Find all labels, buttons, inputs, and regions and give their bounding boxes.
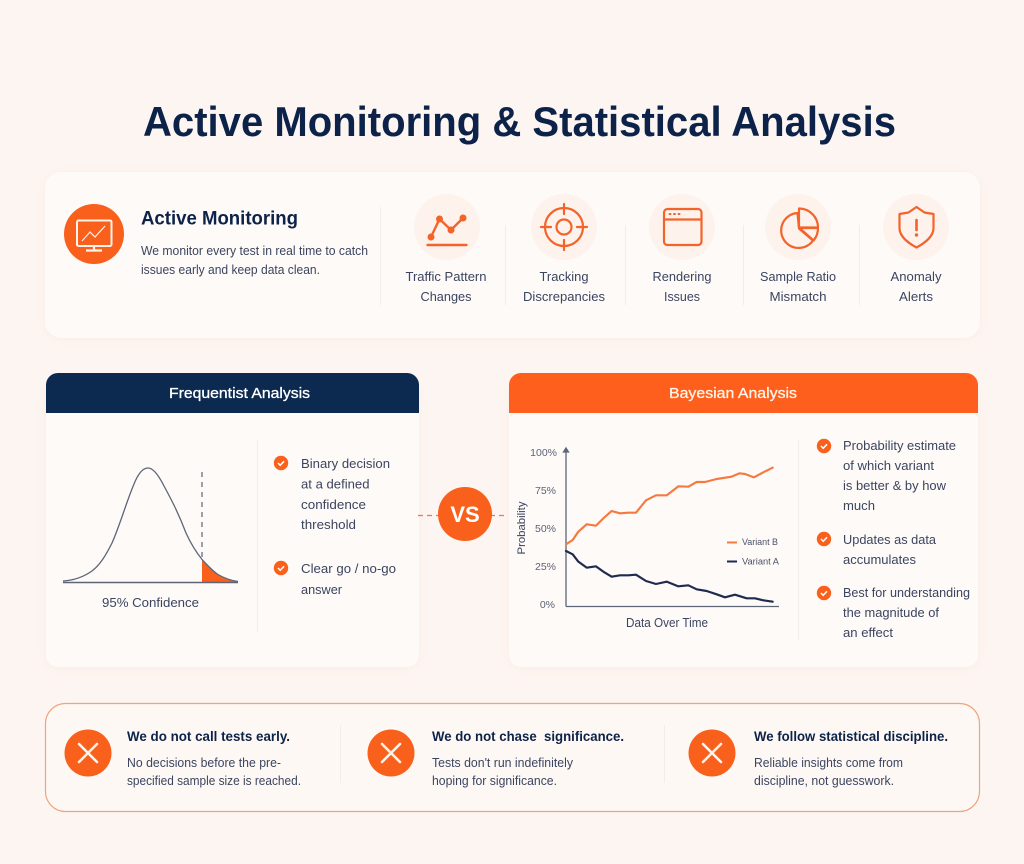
header: bayesian analysis bbox=[509, 373, 978, 413]
bullet: binary decision: threshold bbox=[301, 518, 356, 532]
chart: probability over time: Variant B bbox=[742, 537, 778, 547]
bullet: binary decision: Binary decision bbox=[301, 457, 390, 471]
chart: probability over time: 100% bbox=[530, 447, 557, 459]
icon: monitor bbox=[64, 204, 124, 264]
bullet: clear go / no-go bbox=[274, 561, 396, 597]
item: do not call tests early: We do not call tests early. bbox=[127, 729, 290, 744]
chart: probability over time: Data Over Time bbox=[626, 616, 708, 630]
item: traffic pattern changes: Traffic Pattern bbox=[406, 270, 487, 284]
bullet: probability estimate bbox=[817, 439, 956, 513]
chart: probability over time: 0% bbox=[540, 599, 555, 611]
item: tracking discrepancies: Tracking bbox=[540, 270, 589, 284]
panel: statistical discipline bbox=[46, 704, 980, 812]
vs badge: VS bbox=[450, 502, 480, 527]
bullet: clear go / no-go: answer bbox=[301, 583, 342, 597]
header: frequentist analysis bbox=[46, 373, 419, 413]
chart: probability over time: Variant A bbox=[742, 556, 779, 566]
chart: bell curve bbox=[63, 468, 238, 610]
item: rendering issues: Issues bbox=[664, 290, 700, 304]
bullet: best for understanding: the magnitude of bbox=[843, 606, 940, 620]
item: follow statistical discipline: We follow statistical discipline. bbox=[754, 729, 948, 744]
chart: probability over time: 50% bbox=[535, 523, 556, 535]
bullet: binary decision: at a defined bbox=[301, 478, 370, 492]
bullet: probability estimate: is better & by how bbox=[843, 479, 947, 493]
bullet: updates as data accumulates: accumulates bbox=[843, 553, 916, 567]
chart: probability over time bbox=[516, 447, 779, 630]
item: sample ratio mismatch: Mismatch bbox=[770, 290, 827, 304]
item: do not call tests early: specified sample size is reached. bbox=[127, 774, 301, 788]
bullet: clear go / no-go: Clear go / no-go bbox=[301, 562, 396, 576]
item: anomaly alerts: Alerts bbox=[899, 290, 933, 304]
bullet: binary decision bbox=[274, 456, 390, 532]
bullet: probability estimate: of which variant bbox=[843, 459, 935, 473]
item: rendering issues bbox=[649, 194, 715, 304]
bullet: probability estimate: much bbox=[843, 499, 875, 513]
bullet: best for understanding: Best for understanding bbox=[843, 586, 970, 600]
text: monitoring description: We monitor every test in real time to catch bbox=[141, 244, 368, 258]
item: anomaly alerts bbox=[883, 194, 949, 304]
item: do not chase significance: Tests don't run indefinitely bbox=[432, 756, 574, 770]
item: tracking discrepancies bbox=[523, 194, 605, 304]
item: rendering issues: Rendering bbox=[652, 270, 712, 284]
bullet: probability estimate: Probability estimate bbox=[843, 439, 956, 453]
item: do not chase significance: hoping for significance. bbox=[432, 774, 557, 788]
chart: probability over time: 25% bbox=[535, 561, 556, 573]
bullet: updates as data accumulates: Updates as data bbox=[843, 533, 936, 547]
chart: probability over time: 75% bbox=[535, 485, 556, 497]
bullet: binary decision: confidence bbox=[301, 498, 366, 512]
text: monitoring description: issues early and keep data clean. bbox=[141, 263, 320, 277]
panel: bayesian analysis bbox=[509, 373, 978, 667]
item: follow statistical discipline bbox=[688, 729, 948, 788]
item: follow statistical discipline: discipline, not guesswork. bbox=[754, 774, 894, 788]
item: anomaly alerts: Anomaly bbox=[890, 270, 942, 284]
bullet: best for understanding: an effect bbox=[843, 626, 894, 640]
item: traffic pattern changes: Changes bbox=[420, 290, 472, 304]
item: sample ratio mismatch: Sample Ratio bbox=[760, 270, 836, 284]
item: sample ratio mismatch bbox=[760, 194, 836, 304]
heading: active monitoring: Active Monitoring bbox=[141, 208, 298, 230]
item: do not chase significance bbox=[368, 729, 624, 788]
item: traffic pattern changes bbox=[406, 194, 487, 304]
header: frequentist analysis: Frequentist Analysis bbox=[169, 385, 310, 402]
chart: probability over time: Probability bbox=[516, 501, 528, 554]
title: Active Monitoring & Statistical Analysis bbox=[143, 98, 896, 145]
item: do not call tests early bbox=[64, 729, 301, 788]
item: tracking discrepancies: Discrepancies bbox=[523, 290, 605, 304]
panel: frequentist analysis bbox=[46, 373, 419, 667]
item: do not chase significance: We do not chase significance. bbox=[432, 729, 624, 744]
bullet: best for understanding bbox=[817, 586, 970, 640]
header: bayesian analysis: Bayesian Analysis bbox=[669, 385, 797, 402]
panel: active monitoring bbox=[45, 172, 980, 338]
chart: bell curve: 95% Confidence bbox=[102, 596, 199, 610]
text: monitoring description bbox=[141, 244, 368, 277]
vs badge bbox=[418, 487, 508, 541]
bullet: updates as data accumulates bbox=[817, 532, 936, 567]
item: do not call tests early: No decisions before the pre- bbox=[127, 756, 281, 770]
item: follow statistical discipline: Reliable insights come from bbox=[754, 756, 903, 770]
